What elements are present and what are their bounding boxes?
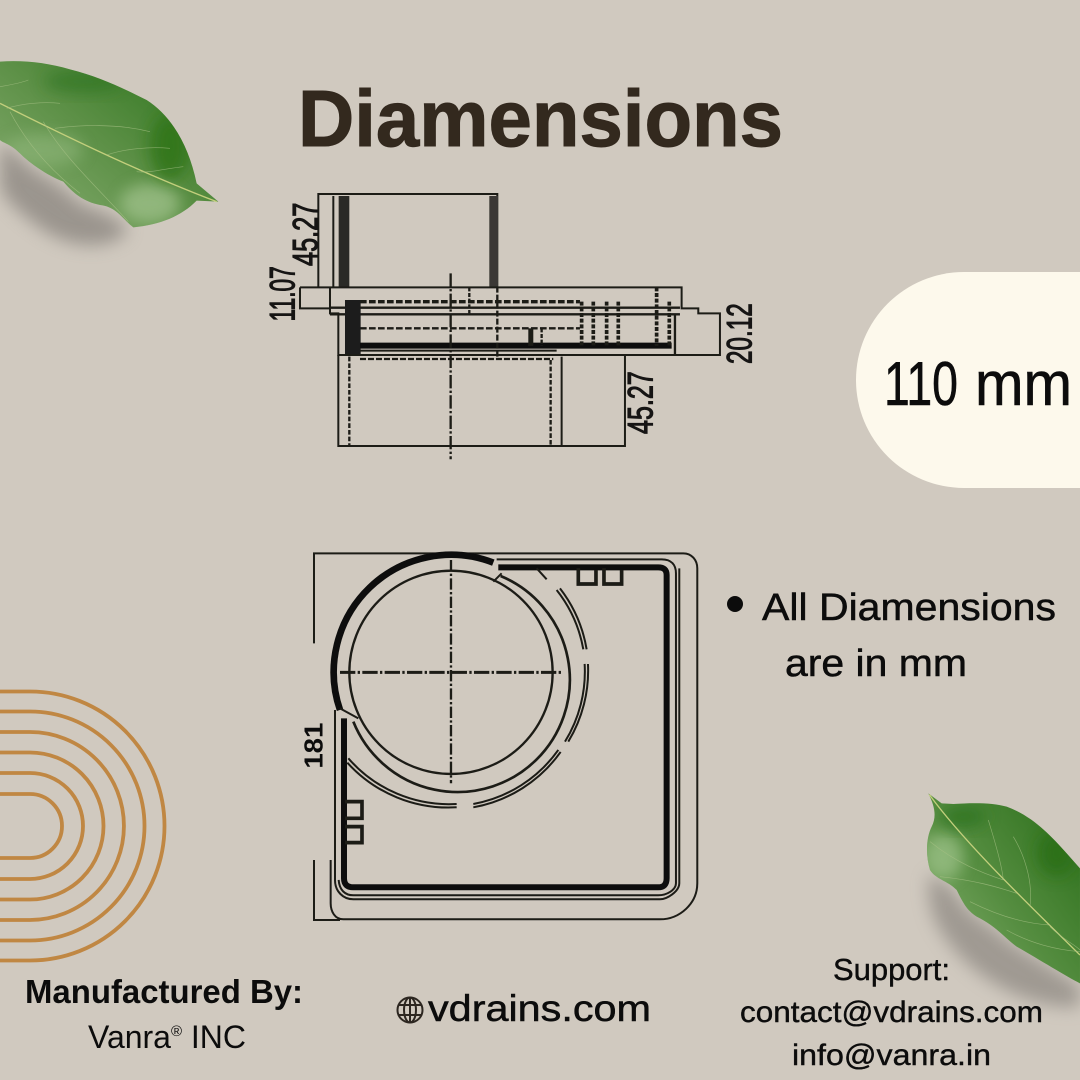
label: 181: 181 bbox=[298, 723, 328, 769]
label: 45.27 bottom: 45.27 bbox=[622, 371, 661, 434]
icon: globe bbox=[398, 998, 422, 1022]
title: Diamensions bbox=[298, 74, 783, 163]
label: 110 mm: mm bbox=[975, 350, 1072, 419]
text block: support bbox=[740, 952, 1043, 1072]
label: 45.27 top: 45.27 bbox=[286, 203, 325, 266]
line two: are in mm bbox=[785, 643, 967, 685]
company: ® bbox=[171, 1023, 182, 1040]
website: vdrains.com bbox=[428, 988, 651, 1029]
icon: leaf top left bbox=[0, 61, 218, 245]
label: 20.12: 20.12 bbox=[720, 303, 759, 364]
support heading: Support: bbox=[833, 952, 950, 987]
label: 110 mm: 110 bbox=[884, 350, 958, 419]
label: 11.07: 11.07 bbox=[264, 266, 303, 321]
line one: All Diamensions bbox=[762, 587, 1056, 629]
icon: concentric orange arches bbox=[0, 692, 164, 960]
manufactured by: Manufactured By: bbox=[25, 973, 303, 1010]
text block: manufacturer bbox=[25, 973, 303, 1055]
company: INC bbox=[182, 1019, 246, 1055]
text block: dimensions note bbox=[727, 587, 1056, 685]
bullet bbox=[727, 596, 743, 612]
icon: leaf bottom right bbox=[923, 793, 1080, 1007]
chart: side section drawing bbox=[264, 194, 759, 459]
company: Vanra bbox=[88, 1019, 171, 1055]
panel: 110 mm pill bbox=[856, 272, 1080, 488]
contact email: contact@vdrains.com bbox=[740, 996, 1043, 1029]
chart: top plan drawing bbox=[298, 553, 697, 920]
info email: info@vanra.in bbox=[792, 1039, 991, 1072]
